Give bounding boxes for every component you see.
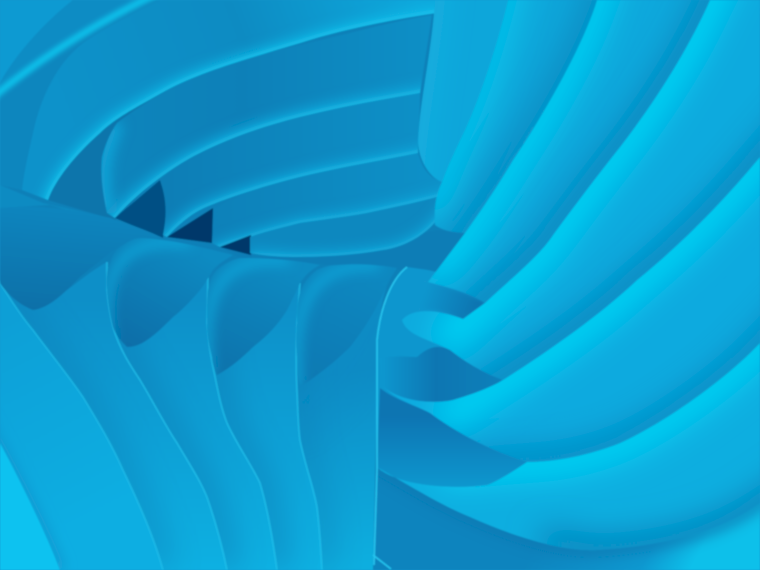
group: right ribbons xyxy=(372,0,760,570)
lobe: first dark fold xyxy=(0,207,163,310)
ribbon: fifth xyxy=(390,157,760,462)
ribbon: top wide xyxy=(22,0,436,200)
ribbon: first xyxy=(418,0,508,182)
dark under band xyxy=(220,230,470,285)
strip: far left xyxy=(0,284,163,570)
group: central swirl xyxy=(377,267,527,487)
strip: corner highlight xyxy=(0,443,60,570)
dark gap three xyxy=(220,235,251,255)
wedge: dark fold xyxy=(380,347,503,402)
ribbon: sixth xyxy=(378,343,760,550)
ribbon: corner xyxy=(0,0,73,83)
rims: strip edges xyxy=(0,255,322,570)
rim: lower thin line xyxy=(373,555,391,569)
lobe: lower dark fold xyxy=(377,388,527,487)
ribbon: third xyxy=(428,0,710,302)
dark gap two xyxy=(167,208,213,243)
ribbon: bright streak band xyxy=(0,0,150,96)
ribbon: second xyxy=(434,0,596,233)
strip: third xyxy=(114,282,277,570)
panel: centre fill xyxy=(377,267,520,470)
strip: fourth xyxy=(214,288,322,570)
band: shadow below top ribbon xyxy=(48,90,167,220)
ribbon: dark outer band xyxy=(0,0,165,190)
band: above first fold xyxy=(0,185,163,238)
dark gap one xyxy=(115,180,168,238)
ribbon: eighth xyxy=(249,197,436,258)
ribbon: bottom right corner xyxy=(378,468,760,570)
strip: second xyxy=(2,264,227,570)
group: bottom-left ribbons xyxy=(0,186,396,570)
lobe: second fold xyxy=(106,238,231,347)
ribbon: seventh xyxy=(212,154,442,248)
lobe: fourth fold xyxy=(295,264,396,384)
strip: fifth xyxy=(297,292,384,570)
lobe: third fold xyxy=(206,258,317,373)
group: top-left ribbons xyxy=(0,0,442,258)
rim: vertical centre line xyxy=(374,267,407,565)
shadow: below third ribbon tip xyxy=(418,280,488,322)
streak: outer highlight xyxy=(0,0,165,108)
ribbon: fifth xyxy=(100,16,432,218)
ribbon: sixth xyxy=(161,93,420,238)
ribbon: fourth xyxy=(402,0,760,380)
